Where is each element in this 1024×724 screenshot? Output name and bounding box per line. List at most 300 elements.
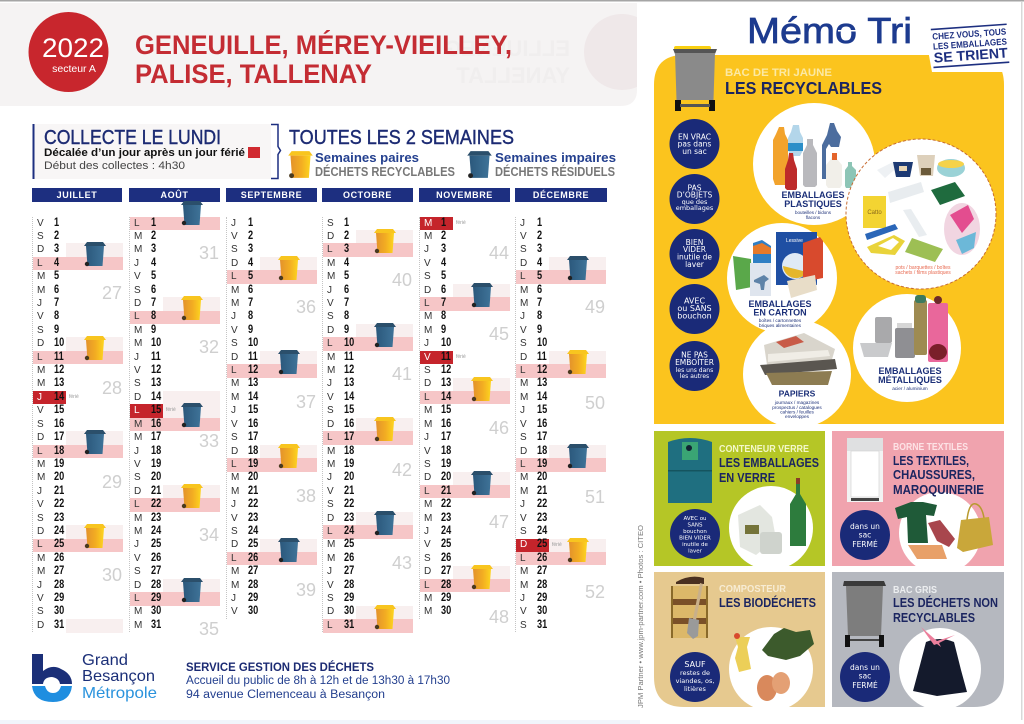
calendar: août: 8 [151, 310, 156, 322]
calendar: décembre: M [520, 378, 528, 389]
calendar: décembre: 23 [537, 512, 547, 524]
calendar: octobre: 22 [344, 498, 354, 510]
calendar: septembre: L [231, 271, 237, 282]
collection day box: COLLECTE LE LUNDI [44, 127, 221, 149]
calendar: septembre: V [231, 513, 238, 524]
calendar: septembre: D [231, 539, 238, 550]
calendar: août: 11 [151, 351, 161, 363]
calendar: octobre: M [327, 539, 335, 550]
calendar: décembre: 13 [537, 377, 547, 389]
calendar: décembre: J [520, 405, 525, 416]
panel: non recyclables: BAC GRIS [893, 585, 937, 596]
calendar: août: 30 [151, 605, 161, 617]
panel: verre: CONTENEUR VERRE [719, 444, 809, 455]
calendar: octobre: J [327, 566, 332, 577]
calendar: septembre: 27 [248, 565, 258, 577]
calendar: novembre: S [424, 459, 431, 470]
calendar: août: 4 [151, 257, 156, 269]
calendar: décembre: M [520, 580, 528, 591]
calendar: août: M [134, 432, 142, 443]
calendar: décembre: D [520, 352, 527, 363]
calendar: novembre: M [424, 499, 432, 510]
tip: dans un sac ferme: sac [859, 530, 871, 540]
panel: non recyclables: RECYCLABLES [893, 611, 975, 625]
calendar: juillet: 4 [54, 257, 59, 269]
calendar: novembre: 44 [489, 243, 509, 263]
calendar: juillet: 21 [54, 485, 64, 497]
calendar: novembre: J [424, 526, 429, 537]
calendar: décembre: 4 [537, 257, 542, 269]
month header: décembre [515, 188, 607, 202]
calendar: octobre: 41 [392, 364, 412, 384]
calendar: juillet: 30 [102, 565, 122, 585]
calendar: juillet: 28 [54, 579, 64, 591]
calendar: novembre: 16 [441, 418, 451, 430]
calendar: octobre: 28 [344, 579, 354, 591]
calendar: novembre: 11 [441, 351, 451, 363]
calendar: décembre: 6 [537, 284, 542, 296]
calendar: novembre: M [424, 231, 432, 242]
frequency heading: TOUTES LES 2 SEMAINES [289, 127, 514, 149]
calendar: octobre: S [327, 499, 334, 510]
panel heading [725, 67, 882, 98]
calendar: novembre: S [424, 553, 431, 564]
calendar: décembre: 11 [537, 351, 547, 363]
panel heading: LES RECYCLABLES [725, 78, 882, 98]
calendar: octobre: 15 [344, 404, 354, 416]
tip: dans un sac ferme [840, 510, 890, 560]
tip: dans un sac ferme: dans un [850, 663, 880, 672]
legend: yellow bin even weeks: DÉCHETS RECYCLABLES [315, 164, 455, 179]
calendar: novembre: V [424, 352, 431, 363]
calendar: décembre: 51 [585, 487, 605, 507]
calendar: novembre: 25 [441, 538, 451, 550]
calendar: octobre: S [327, 311, 334, 322]
calendar: juillet: 26 [54, 552, 64, 564]
calendar: octobre: 17 [344, 431, 354, 443]
calendar: décembre: 20 [537, 471, 547, 483]
calendar: août: S [134, 378, 141, 389]
calendar: décembre: 52 [585, 582, 605, 602]
calendar: octobre: 13 [344, 377, 354, 389]
calendar: août: V [134, 459, 141, 470]
panel: verre: EN VERRE [719, 471, 775, 485]
calendar: septembre: D [231, 352, 238, 363]
calendar: août: D [134, 392, 141, 403]
calendar: août: S [134, 472, 141, 483]
calendar: août: L [134, 311, 140, 322]
calendar: août: 33 [199, 431, 219, 451]
calendar: août: 20 [151, 471, 161, 483]
month header: octobre [322, 188, 413, 202]
calendar: septembre: 25 [248, 538, 258, 550]
calendar: octobre: M [327, 352, 335, 363]
calendar: juillet: S [37, 606, 44, 617]
calendar: août: 31 [199, 243, 219, 263]
calendar: novembre: M [424, 513, 432, 524]
calendar: août: 6 [151, 284, 156, 296]
calendar: novembre: 20 [441, 471, 451, 483]
calendar: septembre: 29 [248, 592, 258, 604]
calendar: octobre: 1 [344, 217, 349, 229]
calendar: décembre: S [520, 620, 527, 631]
calendar: novembre: 19 [441, 458, 451, 470]
calendar: octobre: D [327, 513, 334, 524]
panel heading: BAC DE TRI JAUNE [725, 67, 832, 79]
calendar: juillet: 10 [54, 337, 64, 349]
calendar: août: V [134, 271, 141, 282]
calendar: novembre: J [424, 432, 429, 443]
calendar: août: 14 [151, 391, 161, 403]
calendar: décembre: 50 [585, 393, 605, 413]
calendar: décembre: J [520, 593, 525, 604]
calendar: novembre: S [424, 365, 431, 376]
logo: Grand Besançon Métropole: Grand [82, 652, 128, 669]
calendar: décembre: V [520, 325, 527, 336]
calendar: août: 17 [151, 431, 161, 443]
calendar: octobre: 16 [344, 418, 354, 430]
calendar: octobre: 19 [344, 458, 354, 470]
calendar: septembre: M [231, 298, 239, 309]
calendar: octobre: 18 [344, 444, 354, 456]
calendar: novembre: M [424, 218, 432, 229]
calendar: octobre: D [327, 606, 334, 617]
calendar: octobre: V [327, 298, 334, 309]
tip: ne pas emboiter: NE PAS [681, 350, 708, 360]
tip: avec ou sans bouchon: ou SANS [677, 304, 712, 313]
circle: emballages plastiques [753, 103, 875, 225]
tip: sauf restes: SAUF [684, 660, 706, 669]
calendar: septembre: J [231, 311, 236, 322]
calendar: décembre: 1 [537, 217, 542, 229]
header panel [0, 3, 660, 106]
tip: dans un sac ferme: FERMÉ [852, 540, 878, 549]
calendar: novembre: D [424, 566, 431, 577]
calendar: août: L [134, 593, 140, 604]
circle: papiers: PAPIERS [779, 388, 816, 398]
calendar: juillet: 29 [102, 472, 122, 492]
month header: décembre: DÉCEMBRE [533, 190, 589, 200]
legend: blue bin odd weeks: Semaines impaires [495, 150, 616, 165]
calendar: août: 34 [199, 525, 219, 545]
calendar: septembre: V [231, 325, 238, 336]
calendar: novembre: 23 [441, 512, 451, 524]
calendar: août: 26 [151, 552, 161, 564]
calendar: juillet: 22 [54, 498, 64, 510]
calendar: septembre: D [231, 446, 238, 456]
calendar: septembre: 23 [248, 512, 258, 524]
calendar: novembre: 24 [441, 525, 451, 537]
calendar: décembre: D [520, 258, 527, 269]
calendar: novembre: férié [456, 220, 466, 226]
tip: dans un sac ferme: FERMÉ [852, 681, 878, 690]
calendar: septembre: S [231, 244, 238, 255]
calendar: juillet: 15 [54, 404, 64, 416]
calendar: septembre: 16 [248, 418, 258, 430]
calendar: décembre: M [520, 298, 528, 309]
calendar: octobre: 27 [344, 565, 354, 577]
legend: yellow bin even weeks [288, 150, 455, 179]
calendar: juillet: S [37, 325, 44, 336]
calendar: septembre: 18 [248, 444, 258, 456]
calendar: juillet: 1 [54, 217, 59, 229]
calendar: août: J [134, 258, 139, 269]
panel: biodechets: LES BIODÉCHETS [719, 595, 816, 610]
tip: ne pas emboiter: EMBOÎTER [675, 358, 714, 367]
year badge [28, 12, 108, 92]
circle: pots barquettes sachets: sachets / films plastiques [895, 270, 951, 276]
month header: novembre: NOVEMBRE [436, 190, 493, 200]
calendar: septembre: L [231, 459, 237, 470]
calendar: décembre: férié [552, 542, 562, 548]
calendar: octobre: L [327, 526, 333, 537]
calendar: juillet: 8 [54, 310, 59, 322]
calendar: août: 7 [151, 297, 156, 309]
calendar: décembre: 25 [537, 538, 547, 550]
calendar: août: 21 [151, 485, 161, 497]
calendar: décembre: 2 [537, 230, 542, 242]
circle: emballages en carton: boîtes / cartonnettes [759, 318, 802, 323]
calendar: octobre: 26 [344, 552, 354, 564]
calendar: décembre: M [520, 472, 528, 483]
calendar: juillet: D [37, 620, 44, 631]
calendar: octobre: J [327, 472, 332, 483]
tip: avec ou sans bouchon bien vider: AVEC ou [683, 516, 707, 522]
panel: textiles: MAROQUINERIE [893, 483, 984, 497]
tip: ne pas emboiter [670, 341, 720, 391]
calendar: novembre [419, 217, 510, 619]
calendar: novembre: 8 [441, 310, 446, 322]
calendar: juillet: S [37, 513, 44, 524]
header panel: ELLIUENEG [444, 36, 570, 61]
tip: avec ou sans bouchon bien vider: bouchon [683, 529, 707, 535]
circle: emballages metalliques [853, 294, 961, 402]
calendar: juillet: 23 [54, 512, 64, 524]
calendar: novembre: L [424, 392, 430, 403]
calendar: décembre: 22 [537, 498, 547, 510]
calendar: novembre: M [424, 593, 432, 604]
icon: grey bin [843, 581, 886, 647]
tip: bien vider: BIEN [686, 238, 703, 247]
calendar: octobre: 42 [392, 460, 412, 480]
circle: emballages en carton: Lessive [786, 238, 803, 244]
calendar: juillet: 27 [54, 565, 64, 577]
title: communes: GENEUILLE, MÉREY-VIEILLEY, [135, 29, 512, 60]
calendar: octobre: 14 [344, 391, 354, 403]
calendar: juillet: M [37, 566, 45, 577]
calendar: novembre: 7 [441, 297, 446, 309]
calendar: novembre: J [424, 338, 429, 349]
calendar: décembre: M [520, 392, 528, 403]
calendar: octobre: 29 [344, 592, 354, 604]
calendar: novembre: 18 [441, 444, 451, 456]
calendar: décembre: 15 [537, 404, 547, 416]
panel: textiles: BORNE TEXTILES [893, 442, 968, 453]
calendar: octobre [322, 217, 413, 632]
calendar: août: V [134, 365, 141, 376]
calendar: décembre: 30 [537, 605, 547, 617]
calendar: août: 18 [151, 444, 161, 456]
calendar: septembre: 38 [296, 486, 316, 506]
calendar: juillet: 19 [54, 458, 64, 470]
calendar: octobre: M [327, 553, 335, 564]
calendar: septembre: 8 [248, 310, 253, 322]
calendar: novembre: L [424, 580, 430, 591]
calendar: août: 25 [151, 538, 161, 550]
tip: dans un sac ferme: dans un [850, 522, 880, 531]
tip: en vrac: pas dans [678, 140, 711, 148]
calendar: octobre: 12 [344, 364, 354, 376]
calendar: décembre: 16 [537, 418, 547, 430]
calendar: septembre: M [231, 566, 239, 577]
calendar: décembre: 19 [537, 458, 547, 470]
calendar: décembre: 49 [585, 297, 605, 317]
icon: glass jars and bottle [738, 478, 806, 555]
calendar: septembre: 19 [248, 458, 258, 470]
calendar: septembre: 30 [248, 605, 258, 617]
calendar: août: 24 [151, 525, 161, 537]
collection day box: Décalée d’un jour après un jour férié [44, 147, 245, 159]
calendar: octobre: L [327, 244, 333, 255]
calendar: août: M [134, 606, 142, 617]
panel: textiles: CHAUSSURES, [893, 468, 975, 482]
calendar: septembre: V [231, 606, 238, 617]
calendar: octobre: 6 [344, 284, 349, 296]
calendar: novembre: 45 [489, 324, 509, 344]
calendar: août: 9 [151, 324, 156, 336]
tip: avec ou sans bouchon: AVEC [684, 296, 705, 306]
calendar: décembre: J [520, 311, 525, 322]
calendar: octobre: 7 [344, 297, 349, 309]
calendar: septembre: J [231, 218, 236, 229]
calendar: novembre: 2 [441, 230, 446, 242]
calendar: août: 29 [151, 592, 161, 604]
logo: Grand Besançon Métropole [32, 652, 157, 702]
sticker: chez vous tous les emballages se trient: SE TRIENT [933, 44, 1009, 66]
circle: pots barquettes sachets: pots / barquettes / boîtes [895, 265, 951, 271]
tip: bien vider: laver [685, 260, 705, 269]
calendar: novembre: 14 [441, 391, 451, 403]
panel: biodechets [654, 572, 825, 711]
calendar: juillet: M [37, 365, 45, 376]
circle: papiers: enveloppes [785, 414, 810, 419]
calendar: juillet: J [37, 392, 42, 403]
logo: Grand Besançon Métropole: Besançon [82, 668, 155, 685]
calendar: juillet: 28 [102, 378, 122, 398]
calendar: juillet: 24 [54, 525, 64, 537]
calendar: août: 31 [151, 619, 161, 631]
calendar: août: 19 [151, 458, 161, 470]
calendar: novembre: D [424, 285, 431, 296]
calendar: décembre: 12 [537, 364, 547, 376]
circle: emballages en carton: EN CARTON [753, 308, 807, 318]
calendar: juillet: S [37, 231, 44, 242]
calendar: juillet: M [37, 285, 45, 296]
calendar: août: 28 [151, 579, 161, 591]
calendar: octobre: D [327, 231, 334, 242]
calendar: décembre: 17 [537, 431, 547, 443]
calendar: juillet: V [37, 218, 44, 229]
calendar: décembre: 3 [537, 243, 542, 255]
calendar: août: 13 [151, 377, 161, 389]
sticker: chez vous tous les emballages se trient [928, 23, 1010, 72]
title: communes [135, 29, 512, 89]
calendar: octobre: 8 [344, 310, 349, 322]
calendar: novembre: 47 [489, 512, 509, 532]
calendar: août: J [134, 446, 139, 456]
calendar: juillet: 25 [54, 538, 64, 550]
tip: pas d'objets: PAS [688, 184, 702, 192]
legend: blue bin odd weeks: DÉCHETS RÉSIDUELS [495, 164, 615, 179]
calendar: août: 1 [151, 217, 156, 229]
calendar: août: D [134, 298, 141, 309]
tip: pas d'objets [670, 174, 720, 224]
calendar: novembre: 13 [441, 377, 451, 389]
tip: avec ou sans bouchon bien vider [670, 509, 720, 559]
panel: non recyclables [832, 572, 1004, 710]
calendar: juillet: J [37, 486, 42, 497]
calendar: novembre: 3 [441, 243, 446, 255]
calendar: octobre: 43 [392, 553, 412, 573]
calendar: août: 3 [151, 243, 156, 255]
month header: septembre: SEPTEMBRE [241, 190, 302, 200]
month header: août [129, 188, 220, 202]
calendar: décembre: M [520, 486, 528, 497]
calendar: août: M [134, 338, 142, 349]
calendar: octobre: 31 [344, 619, 354, 631]
calendar: août: 10 [151, 337, 161, 349]
calendar: juillet: férié [69, 394, 79, 400]
calendar: novembre: M [424, 311, 432, 322]
calendar: octobre: M [327, 365, 335, 376]
calendar: juillet: 16 [54, 418, 64, 430]
circle: papiers: journaux / magazines [774, 400, 820, 405]
calendar: décembre: L [520, 459, 526, 470]
circle: pots barquettes sachets: Catto [867, 210, 882, 216]
tip: bien vider: inutile de [677, 252, 712, 262]
panel: verre: LES EMBALLAGES [719, 456, 819, 470]
calendar: septembre: 37 [296, 392, 316, 412]
calendar: novembre: V [424, 539, 431, 550]
calendar: juillet: L [37, 446, 43, 456]
icon: apple core grass eggshell [734, 628, 814, 701]
calendar: novembre: 12 [441, 364, 451, 376]
calendar: novembre: M [424, 606, 432, 617]
calendar: septembre: 4 [248, 257, 253, 269]
calendar: août: L [134, 499, 140, 510]
tip: avec ou sans bouchon bien vider: BIEN VIDER [679, 536, 711, 542]
calendar: décembre: 10 [537, 337, 547, 349]
calendar: septembre: 5 [248, 270, 253, 282]
calendar: août [129, 217, 220, 632]
calendar: novembre: 4 [441, 257, 446, 269]
calendar: août: 5 [151, 270, 156, 282]
month header: juillet [32, 188, 122, 202]
calendar: septembre: J [231, 593, 236, 604]
calendar: juillet: J [37, 298, 42, 309]
calendar: octobre: D [327, 419, 334, 430]
tip: avec ou sans bouchon: bouchon [677, 312, 712, 320]
calendar: septembre: S [231, 432, 238, 443]
calendar: août: 27 [151, 565, 161, 577]
tip: ne pas emboiter: les autres [680, 373, 709, 380]
calendar: juillet: L [37, 258, 43, 269]
month header: septembre [226, 188, 317, 202]
calendar: août: M [134, 231, 142, 242]
calendar: octobre: D [327, 325, 334, 336]
calendar: décembre: M [520, 566, 528, 577]
calendar: juillet: V [37, 311, 44, 322]
